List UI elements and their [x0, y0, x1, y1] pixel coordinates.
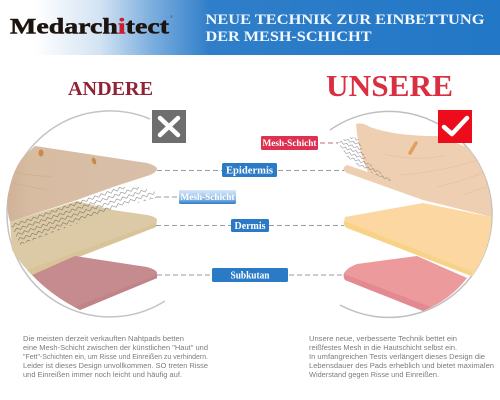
text block: left description: Die meisten derzeit verkauften Nahtpads betten: [23, 334, 184, 343]
heading: UNSERE: UNSERE: [326, 68, 453, 103]
text block: right description: Unsere neue, verbesserte Technik bettet ein: [309, 334, 457, 343]
circle outline right: [330, 111, 492, 317]
label: Mesh-Schicht right: [261, 136, 318, 150]
title: NEUE TECHNIK ZUR EINBETTUNG: [206, 12, 485, 28]
label: Mesh-Schicht right: Mesh-Schicht: [262, 138, 316, 148]
layer: subkutan left: [32, 256, 157, 310]
layer: epidermis left: [7, 146, 157, 222]
header banner: [0, 0, 500, 55]
logo: Medarchitect: ®: [170, 14, 173, 19]
panel: left circle cross-section: [7, 111, 165, 317]
text block: left description: "Fett"-Schichten ein, um Risse und Einreißen zu verhindern.: [23, 352, 208, 361]
icon: grey X box: [152, 110, 186, 143]
connector lines: [156, 143, 344, 275]
label: Subkutan: [212, 268, 288, 282]
title: DER MESH-SCHICHT: [206, 29, 372, 45]
label: Mesh-Schicht left: Mesh-Schicht: [180, 192, 234, 202]
circle outline left: [7, 111, 165, 317]
text block: right description: In umfangreichen Tests verlängert dieses Design die: [309, 352, 485, 361]
text block: right description: [309, 334, 494, 379]
label: Epidermis: Epidermis: [226, 166, 273, 176]
text block: right description: Widerstand gegen Risse und Einreißen.: [309, 370, 439, 379]
text block: left description: und Einreißen immer noch leicht und häufig auf.: [23, 370, 182, 379]
label: Epidermis: [222, 163, 277, 177]
text block: right description: Lebensdauer des Pads erheblich und bietet maximalen: [309, 361, 494, 370]
label: Dermis: Dermis: [234, 221, 266, 232]
mesh layer left: [10, 187, 156, 245]
icon: red check box: [438, 110, 472, 143]
text block: left description: [23, 334, 208, 379]
layer: epidermis right: [343, 123, 492, 217]
label: Dermis: [231, 219, 269, 232]
mesh layer right: [338, 137, 397, 185]
layer: subkutan right: [344, 256, 467, 311]
text block: right description: reißfestes Mesh in die Hautschicht selbst ein.: [309, 343, 457, 352]
layer: dermis right: [344, 203, 492, 276]
text block: left description: Leider ist dieses Design unvollkommen. SO treten Risse: [23, 361, 208, 370]
logo: Medarchitect: Medarch itect: [10, 14, 170, 38]
label: Mesh-Schicht left: [179, 190, 236, 204]
text block: left description: eine Mesh-Schicht zwischen der künstlichen "Haut" und: [23, 343, 208, 352]
title: [206, 12, 485, 45]
label: Subkutan: Subkutan: [230, 270, 270, 282]
heading: ANDERE: ANDERE: [68, 79, 153, 100]
panel: right circle cross-section: [330, 111, 492, 317]
layer: dermis left: [10, 201, 157, 275]
